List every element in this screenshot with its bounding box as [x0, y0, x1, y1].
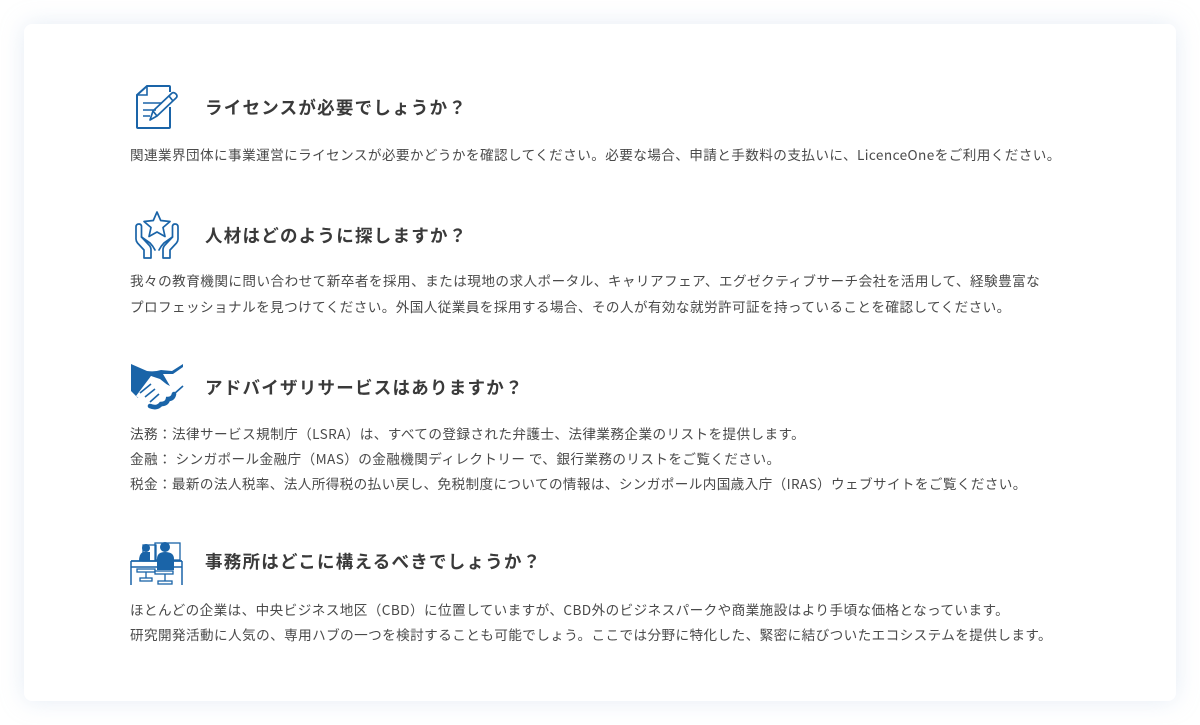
icon: document with pencil: [136, 85, 178, 129]
heading: office: 事務所はどこに構えるべきでしょうか？: [205, 549, 541, 574]
text: talent: 我々の教育機関に問い合わせて新卒者を採用、または現地の求人ポータル、キャリアフェア、エグゼクティブサーチ会社を活用して、経験豊富な: [130, 270, 1040, 290]
text: office line 1: ほとんどの企業は、中央ビジネス地区（CBD）に位置していますが、CBD外のビジネスパークや商業施設はより手頃な価格となっています。: [130, 599, 1009, 619]
heading: advisory: アドバイザリサービスはありますか？: [205, 375, 524, 400]
text: office line 2: 研究開発活動に人気の、専用ハブの一つを検討することも可能でしょう。ここでは分野に特化した、緊密に結びついたエコシステムを提供します。: [130, 624, 1052, 644]
heading: talent: 人材はどのように探しますか？: [205, 223, 468, 248]
icon: hands with star: [135, 211, 179, 259]
text: advisory legal: 法務：法律サービス規制庁（LSRA）は、すべての登録された弁護士、法律業務企業のリストを提供します。: [130, 423, 805, 443]
text: advisory finance: 金融： シンガポール金融庁（MAS）の金融機関ディレクトリー で、銀行業務のリストをご覧ください。: [130, 448, 780, 468]
text: license: 関連業界団体に事業運営にライセンスが必要かどうかを確認してください。必要な場合、申請と手数料の支払いに、LicenceOneをご利用ください。: [130, 144, 1061, 164]
icon: handshake: [131, 364, 184, 410]
text: advisory tax: 税金：最新の法人税率、法人所得税の払い戻し、免税制度についての情報は、シンガポール内国歳入庁（IRAS）ウェブサイトをご覧ください。: [130, 473, 1027, 493]
text: talent line 2: プロフェッショナルを見つけてください。外国人従業員を採用する場合、その人が有効な就労許可証を持っていることを確認してください。: [130, 296, 1011, 316]
heading: license: ライセンスが必要でしょうか？: [205, 95, 467, 120]
icon: office desks: [130, 542, 183, 585]
